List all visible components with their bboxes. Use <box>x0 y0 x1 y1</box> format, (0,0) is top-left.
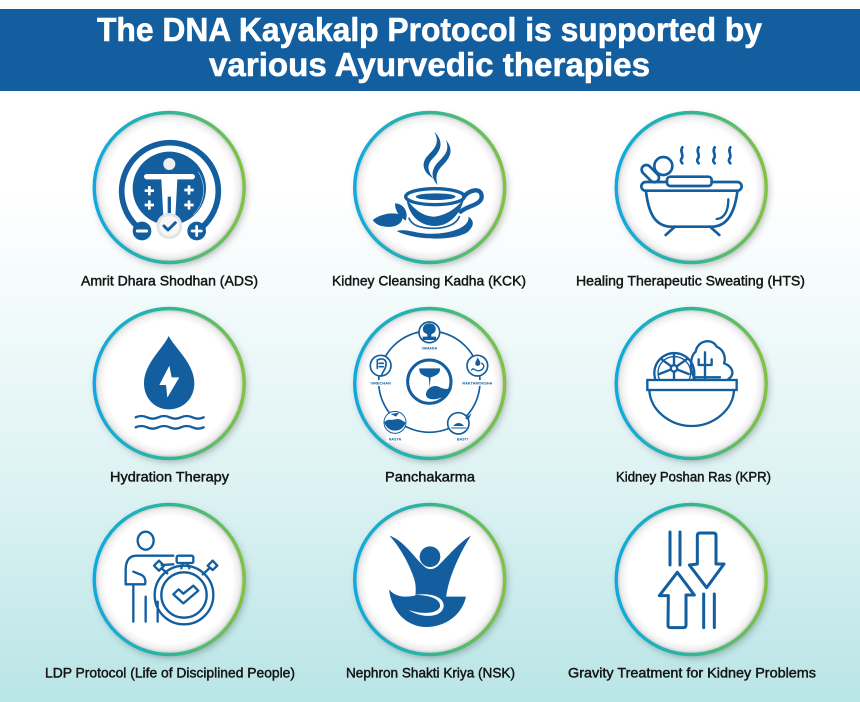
ring <box>94 308 244 458</box>
label: Kidney Cleansing Kadha (KCK) <box>332 272 526 288</box>
small step names <box>370 345 493 442</box>
ring <box>94 112 244 262</box>
icon: up and down arrows <box>659 532 724 628</box>
panel: Panchakarma <box>355 308 505 484</box>
small step names: VAMANA <box>421 347 438 351</box>
small step names: RAKTAMOKSHA <box>462 382 493 386</box>
panel: Kidney Poshan Ras <box>616 308 771 484</box>
ring <box>355 112 505 262</box>
icon: tea cup <box>373 132 482 239</box>
ring <box>616 112 766 262</box>
panel: Kidney Cleansing Kadha <box>332 112 526 288</box>
icon: body balance <box>122 143 218 240</box>
label: Gravity Treatment for Kidney Problems <box>568 664 816 680</box>
small step names: BASTI <box>457 438 468 442</box>
panel: Amrit Dhara Shodhan <box>81 112 258 288</box>
panel: Nephron Shakti Kriya <box>346 504 515 680</box>
label: Amrit Dhara Shodhan (ADS) <box>81 272 258 288</box>
panel: Hydration Therapy <box>94 308 244 484</box>
label: Hydration Therapy <box>110 468 229 484</box>
panel: Healing Therapeutic Sweating <box>576 112 805 288</box>
label: LDP Protocol (Life of Disciplined People) <box>45 664 295 680</box>
small step names: NASYA <box>389 438 402 442</box>
icon: five-step cycle <box>370 322 493 442</box>
ring <box>355 504 505 654</box>
small step names: VIRECHAN <box>370 382 391 386</box>
label: Nephron Shakti Kriya (NSK) <box>346 664 515 680</box>
title line two: various Ayurvedic therapies <box>209 46 650 83</box>
label: Kidney Poshan Ras (KPR) <box>616 468 771 484</box>
ring <box>355 308 505 458</box>
icon: figure with raised arms on leaf <box>389 536 471 627</box>
label: Healing Therapeutic Sweating (HTS) <box>576 272 805 288</box>
icon: water drop with bolt <box>136 336 204 429</box>
ring <box>616 308 766 458</box>
ring <box>616 504 766 654</box>
header banner <box>0 9 860 91</box>
label: Panchakarma <box>385 468 475 484</box>
panel: Gravity Treatment <box>568 504 816 680</box>
icon: bowl with produce <box>647 341 737 426</box>
icon: person with stopwatch <box>126 532 217 624</box>
panel: LDP Protocol <box>45 504 295 680</box>
icon: bath tub <box>640 147 742 235</box>
title line one: The DNA Kayakalp Protocol is supported by <box>97 11 763 48</box>
ring <box>94 504 244 654</box>
